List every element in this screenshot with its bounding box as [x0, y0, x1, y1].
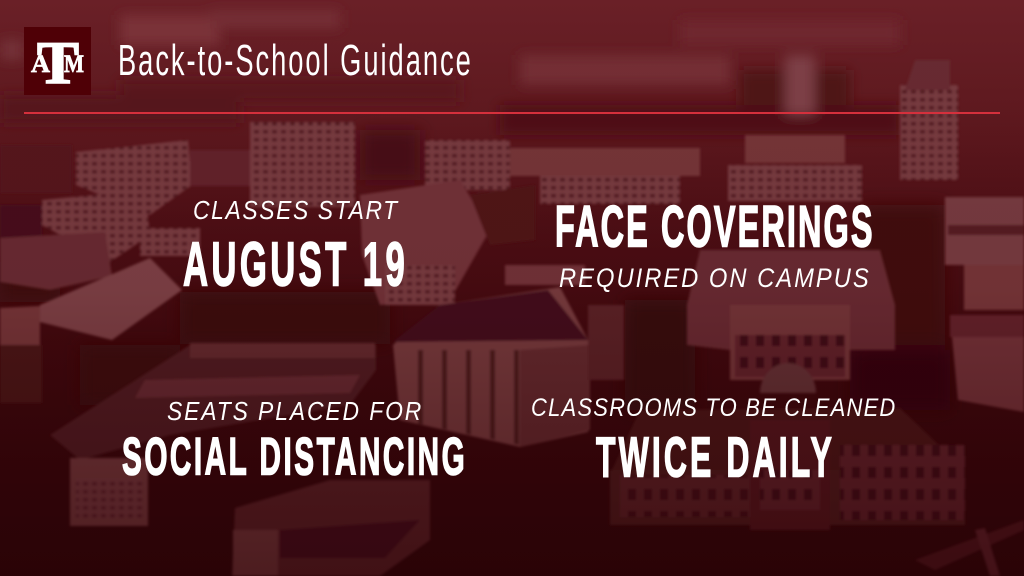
upper right buildings: [745, 135, 845, 163]
main domed building: [610, 408, 965, 525]
logo: Texas A&M: A: [31, 51, 50, 78]
block: classes start: [183, 197, 405, 299]
upper centre buildings: [425, 140, 510, 190]
blurred distant skyline: [0, 10, 900, 135]
centre right hall: [687, 250, 895, 350]
logo: Texas A&M: [24, 27, 91, 96]
block: social distancing: SOCIAL DISTANCING: [122, 428, 465, 487]
block: classes start: AUGUST 19: [183, 230, 405, 299]
block: social distancing: [122, 398, 465, 487]
block: face coverings: REQUIRED ON CAMPUS: [559, 264, 869, 293]
block: twice daily: TWICE DAILY: [596, 425, 832, 489]
logo: Texas A&M: M: [64, 51, 84, 78]
central tall building: [393, 287, 588, 447]
bottom right paths and trees: [915, 520, 1024, 570]
block: face coverings: [555, 193, 873, 293]
block: classes start: CLASSES START: [193, 197, 399, 225]
header rule: [24, 112, 1000, 114]
title: Back-to-School Guidance: [118, 35, 471, 85]
block: twice daily: [531, 394, 895, 489]
block: face coverings: FACE COVERINGS: [555, 193, 873, 259]
lower left roof building: [232, 480, 430, 576]
block: social distancing: SEATS PLACED FOR: [167, 398, 421, 426]
lower left long building: [50, 345, 376, 460]
dark tree masses: [0, 130, 950, 410]
logo: Texas A&M: T: [37, 30, 79, 96]
upper left buildings: [0, 145, 72, 193]
block: twice daily: CLASSROOMS TO BE CLEANED: [531, 394, 895, 421]
